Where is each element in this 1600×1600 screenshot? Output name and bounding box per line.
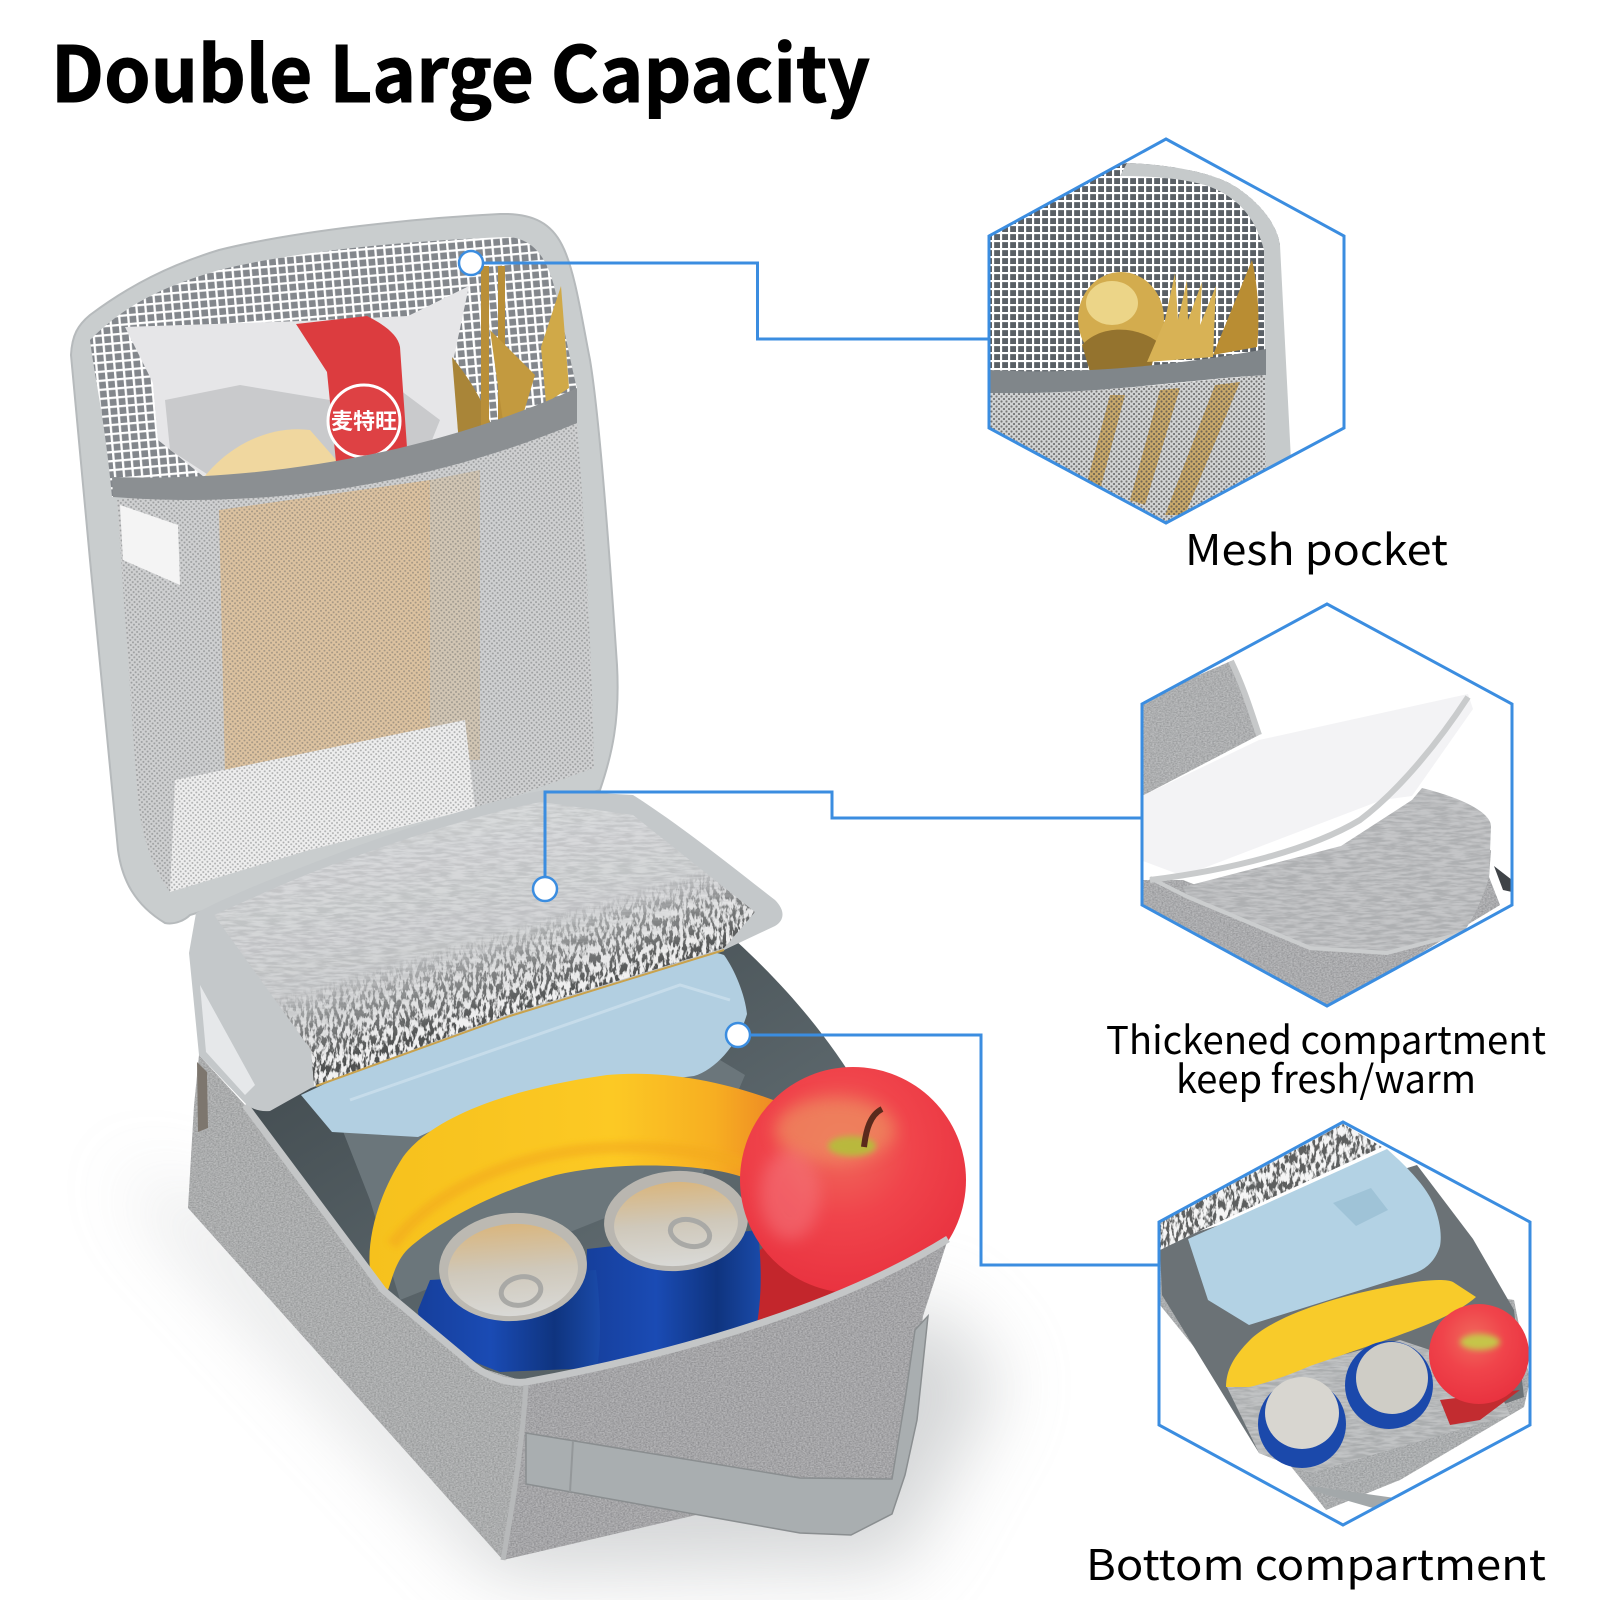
banana — [369, 1074, 776, 1290]
label line one: Thickened compartment — [1106, 1010, 1546, 1066]
title: Double Large Capacity — [51, 14, 870, 125]
front walls over contents — [188, 1055, 948, 1560]
ground shadow — [120, 1170, 1000, 1575]
left wall — [188, 1055, 526, 1560]
hexagon outline — [1159, 1122, 1530, 1525]
label: Bottom compartment — [1086, 1532, 1546, 1593]
label: Mesh pocket — [1185, 517, 1448, 578]
wrapped bread packet: 麦特旺 — [331, 404, 397, 436]
leader line: thickened compartment — [533, 792, 1142, 901]
label line two: keep fresh/warm — [1176, 1049, 1476, 1105]
can left — [418, 1208, 600, 1372]
hexagon outline — [989, 139, 1344, 523]
crinkled foil edge — [280, 873, 754, 1086]
right wall — [503, 1239, 948, 1560]
lid frame — [71, 214, 618, 923]
wrapped bread packet — [125, 286, 469, 477]
panel: bottom compartment hexagon — [1086, 1122, 1546, 1593]
mesh pocket photo — [980, 163, 1292, 523]
apple behind cans — [740, 1240, 840, 1340]
gold cutlery in pocket — [452, 266, 569, 444]
glass container with blue lid — [301, 950, 747, 1300]
lower mesh pocket — [117, 420, 594, 892]
panel: thickened compartment hexagon — [1106, 604, 1546, 1105]
leader line: bottom compartment — [726, 1023, 1159, 1265]
label — [1106, 1010, 1546, 1105]
flap gold edge — [316, 950, 724, 1086]
corner seam — [503, 1385, 526, 1560]
flap binding — [189, 790, 782, 1111]
hexagon outline — [1142, 604, 1512, 1006]
flap side panel — [200, 985, 255, 1095]
apple — [740, 1067, 966, 1293]
insulated flap — [189, 790, 782, 1111]
zipper rim — [245, 1105, 948, 1382]
flap silver lining — [214, 802, 755, 1086]
pocket binding band — [112, 388, 577, 500]
open compartment photo — [1142, 661, 1512, 1010]
carry handle — [526, 1316, 928, 1535]
main product: open lunch bag — [71, 214, 1000, 1575]
can right — [587, 1166, 761, 1366]
panel: mesh pocket hexagon — [980, 139, 1448, 578]
packed compartment photo — [1160, 1124, 1530, 1510]
zipper pull — [197, 1062, 208, 1132]
upper lid — [71, 214, 618, 923]
leader line: mesh pocket — [459, 251, 989, 339]
bag interior — [245, 940, 948, 1382]
upper clear mesh — [90, 237, 577, 497]
